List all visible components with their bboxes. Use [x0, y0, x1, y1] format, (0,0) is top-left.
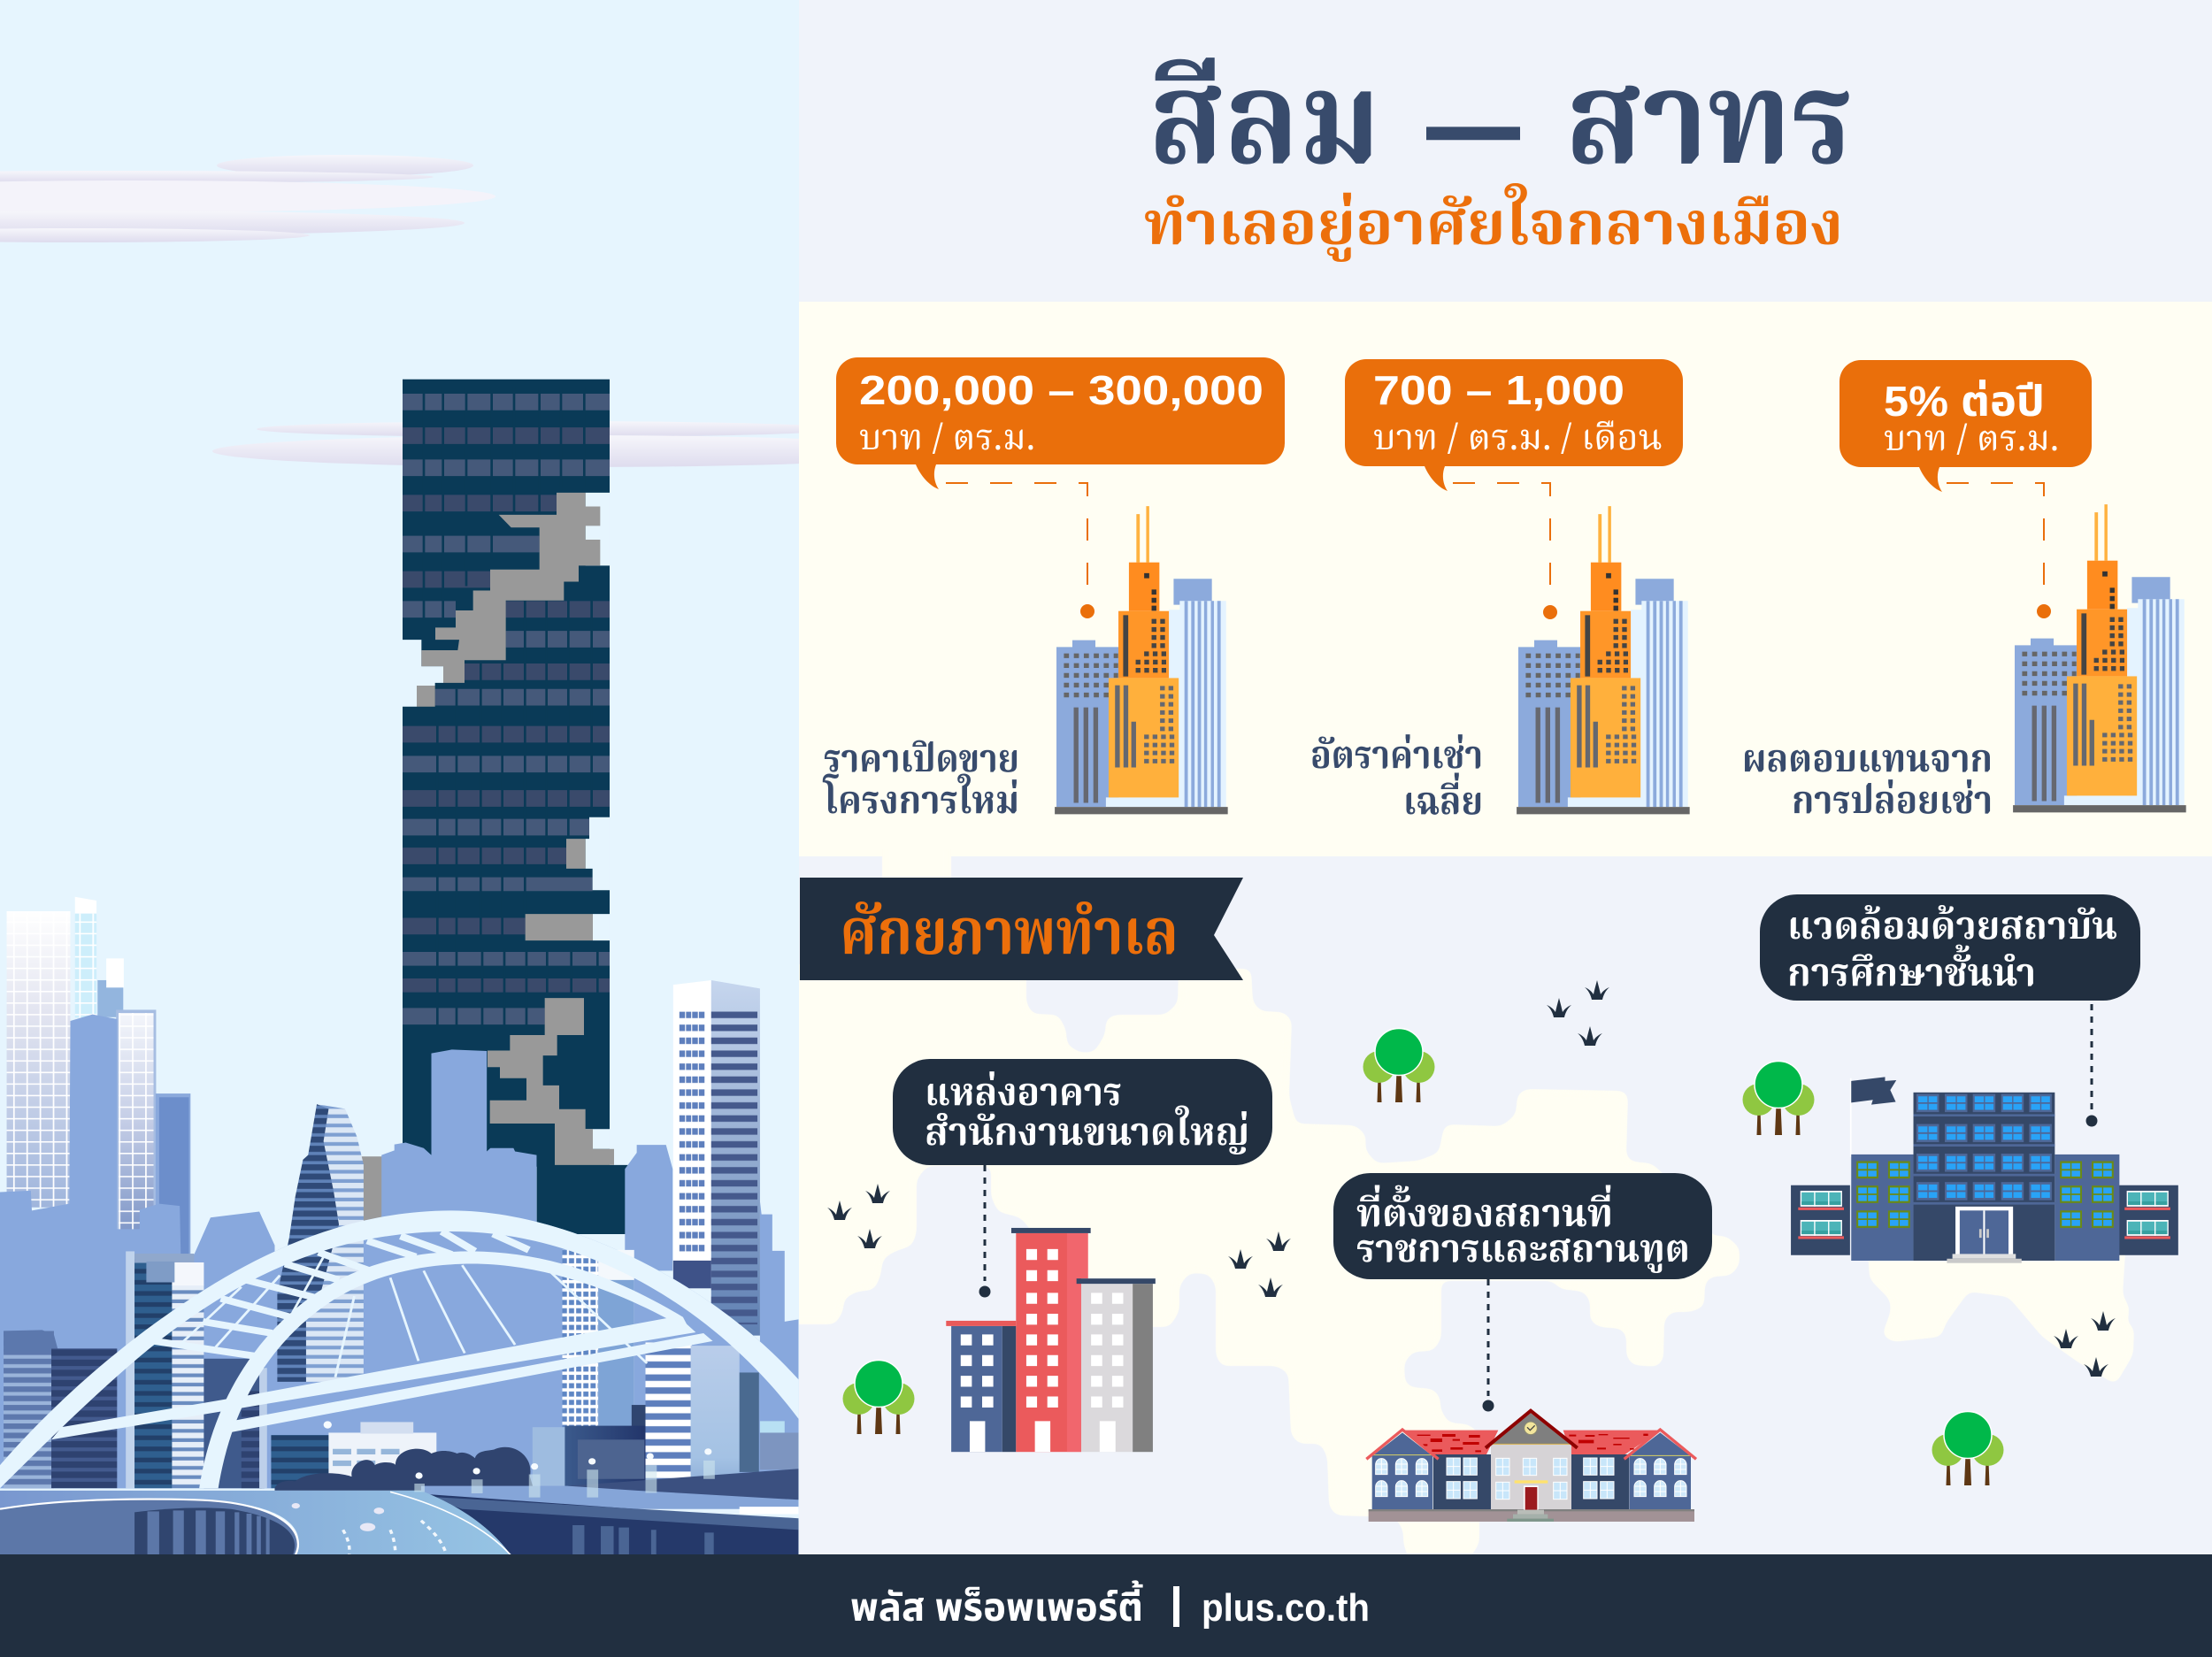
callout: rent per month — [1345, 359, 1683, 491]
label — [1742, 731, 1993, 834]
title: — — [1426, 49, 1520, 197]
footer bar: พลัส พร็อพเพอร์ตี้ — [850, 1579, 1143, 1638]
section heading banner: ศักยภาพทำเล — [840, 886, 1179, 988]
callout: yield per year — [1839, 360, 2092, 492]
icon: skyscraper cluster — [1517, 506, 1690, 814]
label: การปล่อยเช่า — [1792, 772, 1993, 834]
panel: price and rent facts band — [799, 26, 2212, 856]
callout: yield per year: 5% ต่อปี — [1884, 379, 2045, 426]
twisted tower — [277, 1104, 364, 1382]
label: โครงการใหม่ — [822, 772, 1019, 834]
callout: surrounded by leading educational institutions: แวดล้อมด้วยสถาบัน — [1787, 898, 2117, 960]
fact 1: opening price — [822, 357, 1285, 834]
icon: office buildings — [946, 1228, 1156, 1452]
street lamps — [324, 1421, 715, 1498]
label — [822, 731, 1019, 834]
white mid-rise — [328, 1422, 436, 1477]
fact 3: rental yield — [1742, 360, 2186, 834]
label: อัตราค่าเช่า — [1310, 727, 1483, 789]
subtitle: ทำเลอยู่อาศัยใจกลางเมือง — [1144, 181, 1843, 277]
dashed connector — [946, 483, 1087, 586]
label — [1310, 727, 1483, 835]
low-rise left buildings — [4, 1251, 328, 1488]
far left glass towers — [7, 897, 190, 1260]
silhouette in front of tower — [381, 1049, 536, 1229]
label: ผลตอบแทนจาก — [1742, 731, 1993, 793]
callout: large office buildings: สำนักงานขนาดใหญ่ — [925, 1104, 1249, 1166]
right silhouette — [625, 1145, 798, 1379]
icon: skyscraper cluster — [2013, 504, 2186, 812]
tree line — [274, 1447, 534, 1491]
grey block behind bridge — [362, 1156, 382, 1226]
icon: skyscraper cluster — [1055, 506, 1228, 814]
connector to school — [2086, 1004, 2097, 1127]
title: สีลม — [1148, 26, 1380, 232]
callout: price per square metre: 200,000 – 300,000 — [859, 367, 1263, 413]
callout: surrounded by leading educational institutions: การศึกษาชั้นนำ — [1787, 944, 2036, 1007]
footer bar — [0, 1554, 2212, 1657]
panel: location potential map — [774, 840, 2178, 1566]
callout: government offices and embassies: ราชการและสถานทูต — [1356, 1221, 1690, 1283]
panel: illustration of Silom-Sathorn skyline — [0, 0, 799, 1554]
grass tufts — [827, 980, 2116, 1377]
label: เฉลี่ย — [1403, 772, 1483, 835]
fact 2: average rent — [1310, 359, 1690, 835]
cream map blobs — [774, 840, 2134, 1566]
callout: price per square metre — [836, 357, 1285, 489]
icon: embassy building — [1366, 1411, 1696, 1522]
bridge arch — [0, 1210, 798, 1488]
main tower: MahaNakhon — [403, 380, 628, 1234]
callout: rent per month: 700 – 1,000 — [1373, 367, 1624, 413]
cars — [292, 1503, 384, 1531]
callout: government offices and embassies — [1333, 1173, 1712, 1283]
label: ราคาเปิดขาย — [824, 731, 1019, 793]
dashed connector — [1453, 483, 1550, 586]
callout: price per square metre: บาท / ตร.ม. — [859, 412, 1035, 469]
elevated roads and highway — [0, 1469, 798, 1555]
callout: government offices and embassies: ที่ตั้งของสถานที่ — [1356, 1185, 1613, 1247]
callout: yield per year: บาท / ตร.ม. — [1884, 413, 2059, 470]
callout: rent per month: บาท / ตร.ม. / เดือน — [1373, 412, 1663, 469]
clouds — [0, 155, 799, 467]
title: สาทร — [1565, 26, 1854, 232]
callout: large office buildings — [893, 1059, 1272, 1166]
connector to office buildings — [979, 1165, 991, 1297]
low-rise right buildings — [533, 1250, 798, 1506]
icon: school building — [1791, 1077, 2178, 1263]
white office tower right — [673, 980, 760, 1336]
trees — [842, 1028, 2003, 1485]
callout: large office buildings: แหล่งอาคาร — [925, 1064, 1122, 1126]
city skyline and bridge — [0, 897, 798, 1555]
dashed connector — [1947, 483, 2044, 586]
footer bar: plus.co.th — [1202, 1586, 1370, 1630]
callout: surrounded by leading educational institutions — [1760, 894, 2140, 1007]
left silhouette buildings — [0, 1015, 274, 1488]
area under arch — [0, 1210, 798, 1488]
title — [1148, 26, 1854, 232]
connector to embassy — [1483, 1279, 1494, 1412]
